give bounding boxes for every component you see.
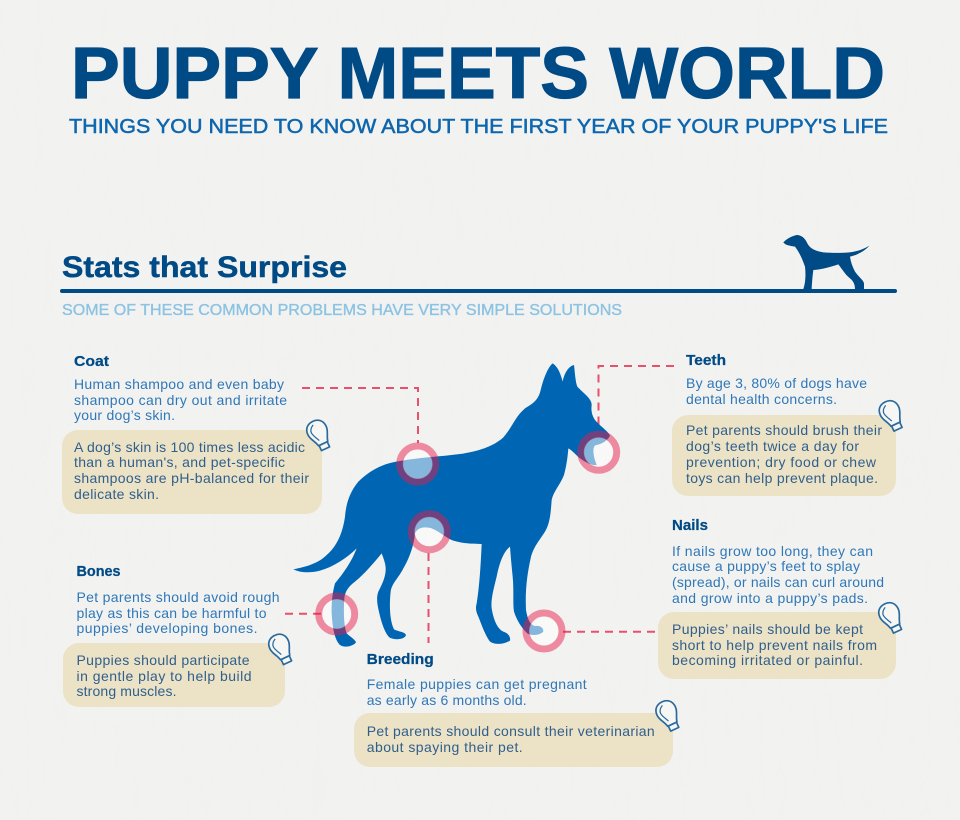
leader line: breeding bbox=[428, 553, 430, 643]
callout: breeding solution: Pet parents should consult their veterinarian bbox=[367, 723, 655, 739]
heading: bones: Bones bbox=[76, 563, 120, 580]
text: nails problem: and grow into a puppy’s pads. bbox=[672, 590, 868, 606]
text: teeth problem: dental health concerns. bbox=[686, 391, 837, 407]
callout: coat solution: shampoos are pH-balanced for their bbox=[74, 470, 309, 486]
leader line: coat bbox=[302, 388, 418, 443]
callout: nails solution: becoming irritated or painful. bbox=[672, 652, 863, 668]
callout: nails solution: short to help prevent nails from bbox=[672, 637, 877, 653]
callout: teeth solution: dog’s teeth twice a day for bbox=[686, 438, 859, 454]
panel: nails bbox=[658, 517, 907, 679]
callout: coat solution: delicate skin. bbox=[74, 486, 159, 502]
leader line: nails bbox=[563, 631, 655, 633]
text: breeding problem bbox=[367, 676, 587, 708]
text: nails problem: (spread), or nails can curl around bbox=[672, 574, 884, 590]
icon: light bulb bbox=[653, 698, 684, 734]
leader line: teeth bbox=[598, 366, 674, 431]
text: teeth problem: By age 3, 80% of dogs have bbox=[686, 375, 867, 391]
text: nails problem: cause a puppy’s feet to splay bbox=[672, 558, 860, 574]
text: nails problem bbox=[672, 543, 884, 606]
panel: bones bbox=[63, 563, 297, 707]
title: PUPPY MEETS WORLD bbox=[71, 34, 885, 114]
callout: bones solution bbox=[63, 643, 285, 707]
text: breeding problem: Female puppies can get pregnant bbox=[367, 676, 587, 692]
text: bones problem bbox=[76, 589, 280, 636]
heading: breeding: Breeding bbox=[367, 651, 434, 668]
callout: bones solution: strong muscles. bbox=[76, 683, 176, 699]
panel: coat bbox=[62, 353, 335, 514]
icon: light bulb bbox=[876, 600, 907, 636]
marker: nails bbox=[526, 613, 562, 649]
text: breeding problem: as early as 6 months old. bbox=[367, 692, 527, 708]
text: coat problem: your dog’s skin. bbox=[74, 407, 175, 423]
section heading: Stats that Surprise bbox=[62, 251, 347, 284]
callout: bones solution: in gentle play to help build bbox=[76, 668, 252, 684]
icon: light bulb bbox=[304, 417, 335, 453]
text: coat problem: shampoo can dry out and irritate bbox=[74, 392, 287, 408]
icon: light bulb bbox=[266, 631, 297, 667]
callout: coat solution bbox=[62, 430, 322, 514]
callout: breeding solution: about spaying their pet. bbox=[367, 739, 523, 755]
marker: teeth bbox=[581, 434, 617, 470]
callout: nails solution: Puppies’ nails should be kept bbox=[672, 621, 863, 637]
callout: coat solution: than a human's, and pet-specific bbox=[74, 454, 285, 470]
text: bones problem: play as this can be harmful to bbox=[76, 605, 267, 621]
heading: coat: Coat bbox=[74, 353, 109, 370]
leader line: bones bbox=[285, 613, 321, 615]
marker: bones bbox=[319, 596, 355, 632]
callout: teeth solution bbox=[672, 415, 896, 496]
text: bones problem: puppies’ developing bones. bbox=[76, 620, 258, 636]
panel: teeth bbox=[672, 352, 907, 496]
divider rule bbox=[60, 289, 897, 293]
marker: coat bbox=[400, 446, 436, 482]
callout: teeth solution: toys can help prevent plaque. bbox=[686, 470, 878, 486]
main dog silhouette bbox=[293, 363, 610, 647]
marker: breeding bbox=[411, 514, 447, 550]
heading: nails: Nails bbox=[672, 517, 708, 534]
icon: light bulb bbox=[876, 398, 907, 434]
heading: teeth: Teeth bbox=[686, 352, 726, 369]
text: teeth problem bbox=[686, 375, 867, 407]
text: coat problem: Human shampoo and even baby bbox=[74, 376, 284, 392]
callout: nails solution bbox=[658, 612, 896, 679]
icon: small dog silhouette bbox=[783, 235, 869, 289]
text: bones problem: Pet parents should avoid rough bbox=[76, 589, 280, 605]
text: coat problem bbox=[74, 376, 287, 423]
callout: teeth solution: Pet parents should brush their bbox=[686, 422, 882, 438]
text: nails problem: If nails grow too long, they can bbox=[672, 543, 873, 559]
callout: teeth solution: prevention; dry food or chew bbox=[686, 454, 877, 470]
callout: breeding solution bbox=[354, 713, 673, 767]
panel: breeding bbox=[354, 651, 684, 767]
section subheading: SOME OF THESE COMMON PROBLEMS HAVE VERY SIMPLE SOLUTIONS bbox=[62, 302, 622, 319]
callout: bones solution: Puppies should participate bbox=[76, 652, 250, 668]
subtitle: THINGS YOU NEED TO KNOW ABOUT THE FIRST YEAR OF YOUR PUPPY'S LIFE bbox=[69, 115, 888, 138]
callout: coat solution: A dog’s skin is 100 times less acidic bbox=[74, 439, 305, 455]
